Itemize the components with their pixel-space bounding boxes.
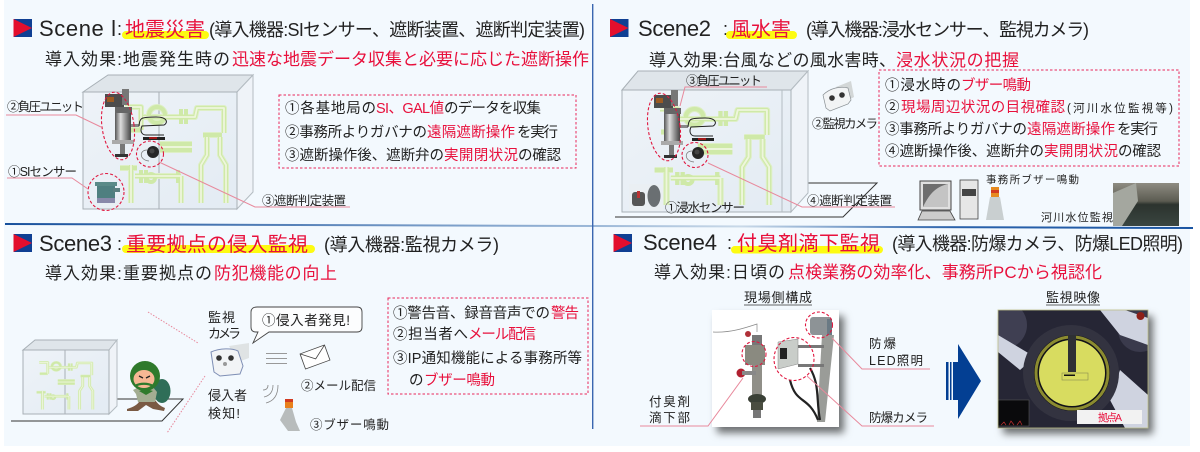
icon: scene 3 marker [14,234,32,252]
text box: scene 3 functions: ブザー鳴動 [424,371,495,389]
icon: mail envelope [300,345,330,369]
heading: scene 1: (導入機器:SIセンサー、遮断装置、遮断判定装置) [209,20,585,40]
text box: scene 3 functions: ①警告音、録音音声での [393,304,550,322]
heading: scene 2: Scene2 [638,16,711,41]
text box: scene 2 functions: ③事務所よりガバナの [885,121,1027,138]
label: explosion proof camera: 防爆カメラ [869,410,928,425]
heading: scene 3: 重要拠点の侵入監視 [126,233,308,256]
label: shutoff judgement device: ④遮断判定装置 [807,194,892,208]
label: intruder detected [208,388,247,421]
panel: scene 2 storm and flood [610,16,1179,226]
heading: scene 4 [643,230,1183,255]
icon: buzzer [280,399,300,431]
text box: scene 1 functions: ②事務所よりガバナの [285,124,427,141]
heading: monitoring video: 監視映像 [1046,290,1100,305]
heading: scene 4: 付臭剤滴下監視 [737,232,880,255]
label: explosion proof LED lighting [869,336,923,368]
heading: scene 4: : [727,233,732,253]
heading: scene 2: 風水害 [731,18,791,41]
label: odorant drip section [649,395,690,425]
heading: scene 4: (導入機器:防爆カメラ、防爆LED照明) [892,234,1183,254]
text box: scene 1 functions: SI、GAL値 [376,100,444,117]
diagram: scene 1 cabinet [83,75,253,209]
text box: scene 1 functions: 実開閉状況 [444,147,518,164]
label: odorant drip section: 滴下部 [649,411,690,425]
heading: scene 3: : [117,234,122,254]
text box: scene 3 functions: ③IP通知機能による事務所等 [393,349,582,367]
text box: scene 2 functions: (河川水位監視等) [1067,101,1173,115]
heading: scene 3 [39,231,499,256]
heading: scene 2: : [723,19,728,39]
heading: scene 1 [39,16,585,41]
text box: scene 1 functions: ①各基地局の [285,100,376,117]
label: surveillance camera: カメラ [208,326,241,341]
text box: scene 2 functions: 遠隔遮断操作 [1027,121,1115,138]
diagram: scene 3 cabinet [11,340,183,421]
text: scene 1 effect: 導入効果:地震発生時の [45,50,230,69]
label: mail delivery: ②メール配信 [301,378,376,393]
text box: scene 1 functions: を実行 [517,124,558,141]
text box: scene 2 functions: ①浸水時の [885,77,961,94]
text box: scene 2 functions: の確認 [1118,143,1162,160]
label: explosion proof LED lighting: 防爆 [869,336,896,351]
text box: scene 3 functions: メール配信 [468,326,536,343]
diagram: scene 2 cabinet [615,71,895,217]
label: shutoff judgement device: ③遮断判定装置 [262,194,346,208]
text: scene 3 effect: 導入効果:重要拠点の [45,264,212,283]
label: intruder detected: 侵入者 [208,388,247,403]
label: odorant drip section: 付臭剤 [649,395,690,409]
heading: scene 1: 地震災害 [125,18,205,41]
label: intruder detected: 検知! [208,406,240,421]
label: river level monitoring: 河川水位監視 [1041,210,1113,224]
arrow: site to monitor [946,344,981,419]
callout lines: camera view [148,312,205,433]
heading: scene 1: : [117,19,122,39]
icon: office buzzer [986,187,1004,220]
icon: scene 1 marker [14,19,32,37]
label: flood sensor: ①浸水センサー [665,201,745,215]
text: scene 3 effect [45,264,337,283]
text box: scene 3 functions [388,298,588,394]
heading: scene 3: (導入機器:監視カメラ) [324,235,499,255]
callout: intruder found: ①侵入者発見! [262,312,350,328]
text box: scene 2 functions: ④遮断操作後、遮断弁の [885,143,1044,160]
text box: scene 2 functions: 現場周辺状況の目視確認 [901,99,1066,116]
text box: scene 1 functions: のデータを収集 [444,99,542,117]
label: surveillance camera [208,310,241,341]
text: scene 4 effect: 導入効果:日頃の [654,263,785,282]
label: SI sensor: ①SIセンサー [8,165,77,179]
heading: site configuration: 現場側構成 [744,290,812,305]
text box: scene 3 functions: の [409,373,424,389]
text: scene 4 effect: 点検業務の効率化、事務所PCから視認化 [788,263,1102,282]
horizontal divider [5,224,1193,228]
text: scene 2 effect: 浸水状況の把握 [896,51,1019,70]
text: scene 2 effect: 導入効果:台風などの風水害時、 [649,51,896,70]
icon: scene 4 marker [614,234,632,252]
panel: scene 4 odorant monitoring [614,230,1183,428]
text box: scene 2 functions: ② [885,99,900,116]
callouts: scene 4 highlight ellipses [640,312,934,426]
icon: scene 2 marker [610,19,628,37]
heading: scene 4: Scene4 [643,230,717,255]
text box: scene 1 functions [279,95,576,168]
icon: sound waves [263,385,278,403]
photo: site equipment [712,310,839,427]
photo: river [1113,183,1179,226]
text box: scene 3 functions: ②担当者へ [393,326,468,343]
label: buzzer: ③ブザー鳴動 [310,417,389,432]
icon: office PC [918,180,978,220]
heading: scene 3: Scene3 [39,231,112,256]
label: surveillance camera: 監視 [208,310,235,325]
icon: signal lines [266,354,287,364]
label: surveillance camera: ②監視カメラ [812,116,878,131]
text box: scene 2 functions [879,70,1179,166]
text box: scene 2 functions: を実行 [1117,121,1158,138]
heading: scene 1: Scene l [39,16,116,41]
illustration: thief [127,361,170,411]
text: scene 2 effect [649,51,1019,70]
label: negative pressure unit: ②負圧ユニット [7,100,84,114]
text: scene 1 effect [45,49,589,69]
icon: surveillance camera [823,81,854,111]
text box: scene 1 functions: 遠隔遮断操作 [427,124,515,141]
label: negative pressure unit: ③負圧ユニット [686,74,762,88]
vertical divider [592,4,593,429]
heading: scene 2: (導入機器:浸水センサー、監視カメラ) [806,20,1089,40]
icon: SI sensor [95,182,120,203]
text box: scene 2 functions: 実開閉状況 [1044,143,1118,160]
text box: scene 2 functions: ブザー鳴動 [961,76,1031,94]
callouts: scene 1 highlight ellipses [6,90,350,210]
label: office buzzer: 事務所ブザー鳴動 [986,173,1079,186]
panel: scene 1 earthquake [6,16,589,210]
heading: scene 2 [638,16,1089,41]
text: scene 1 effect: 迅速な地震データ収集と必要に応じた遮断操作 [232,49,589,69]
photo: monitoring video: 拠点A [1098,411,1122,424]
text box: scene 1 functions: ③遮断操作後、遮断弁の [285,147,444,164]
icon: flood sensors [629,184,663,211]
text: scene 3 effect: 防犯機能の向上 [214,264,337,283]
callout: intruder found [251,307,362,343]
photo: monitoring video [979,301,1162,428]
text box: scene 3 functions: 警告 [551,305,579,322]
panel: scene 3 intrusion monitoring [11,231,588,433]
text box: scene 1 functions: の確認 [518,147,562,164]
label: explosion proof LED lighting: LED照明 [869,354,923,368]
icon: surveillance camera [211,343,249,376]
